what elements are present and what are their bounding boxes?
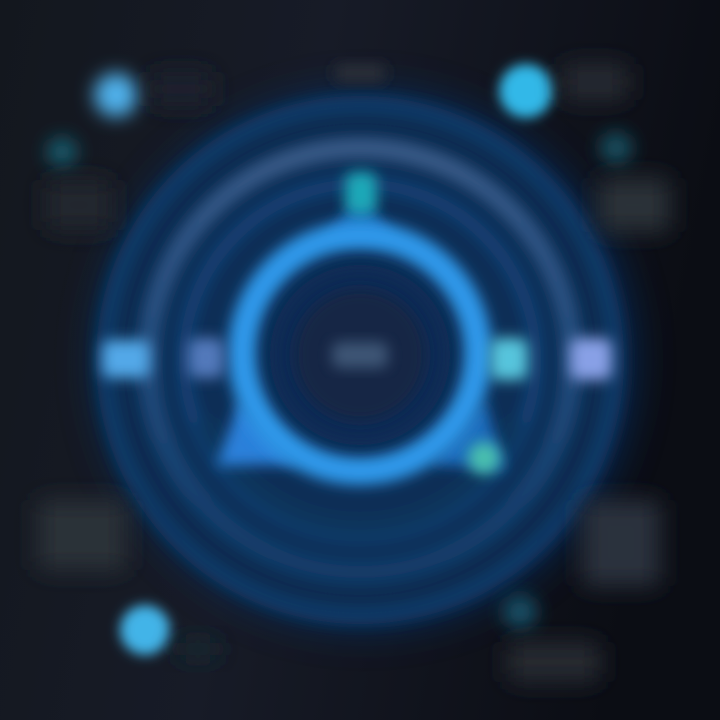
mid ring: [184, 184, 536, 536]
icon: upper right teal dot: [600, 132, 632, 164]
bright triangle glow: [216, 195, 505, 470]
text block: top centre: [335, 64, 385, 82]
lower ring: [205, 420, 515, 527]
icon: top left dot: [94, 73, 138, 117]
icon: upper left teal dot: [47, 137, 77, 167]
icon: bottom left dot: [120, 605, 170, 655]
hub inner ring: [294, 289, 426, 421]
triangle right corner: [430, 400, 505, 470]
triangle left corner: [216, 400, 300, 466]
outer disc: [96, 96, 624, 624]
ring system: [96, 96, 624, 624]
hub label: [332, 342, 388, 368]
text block: top left caption: [150, 72, 212, 106]
text block: upper left: [46, 180, 112, 230]
text block: upper right: [598, 178, 670, 232]
node: right outer: [570, 338, 612, 380]
icon: bottom right teal dot: [503, 595, 537, 629]
upper grey arc ring: [148, 148, 572, 572]
node: left inner: [188, 338, 224, 378]
icon: top right dot: [499, 64, 553, 118]
central dark hub: [270, 265, 450, 445]
node: top teal: [345, 172, 377, 214]
triangle top corner: [325, 195, 395, 240]
text block: lower right: [582, 500, 660, 586]
node: right inner: [490, 338, 528, 380]
outer glow: [97, 92, 633, 628]
text block: bottom left caption: [178, 640, 218, 658]
node: left outer: [102, 340, 150, 378]
bright central ring: [242, 235, 478, 471]
text block: bottom right: [508, 642, 600, 682]
outer dark ring: [124, 124, 596, 596]
node: lower right green: [468, 442, 500, 474]
text block: top right caption: [562, 64, 628, 100]
text block: lower left: [38, 500, 126, 570]
inner field: [160, 160, 560, 560]
